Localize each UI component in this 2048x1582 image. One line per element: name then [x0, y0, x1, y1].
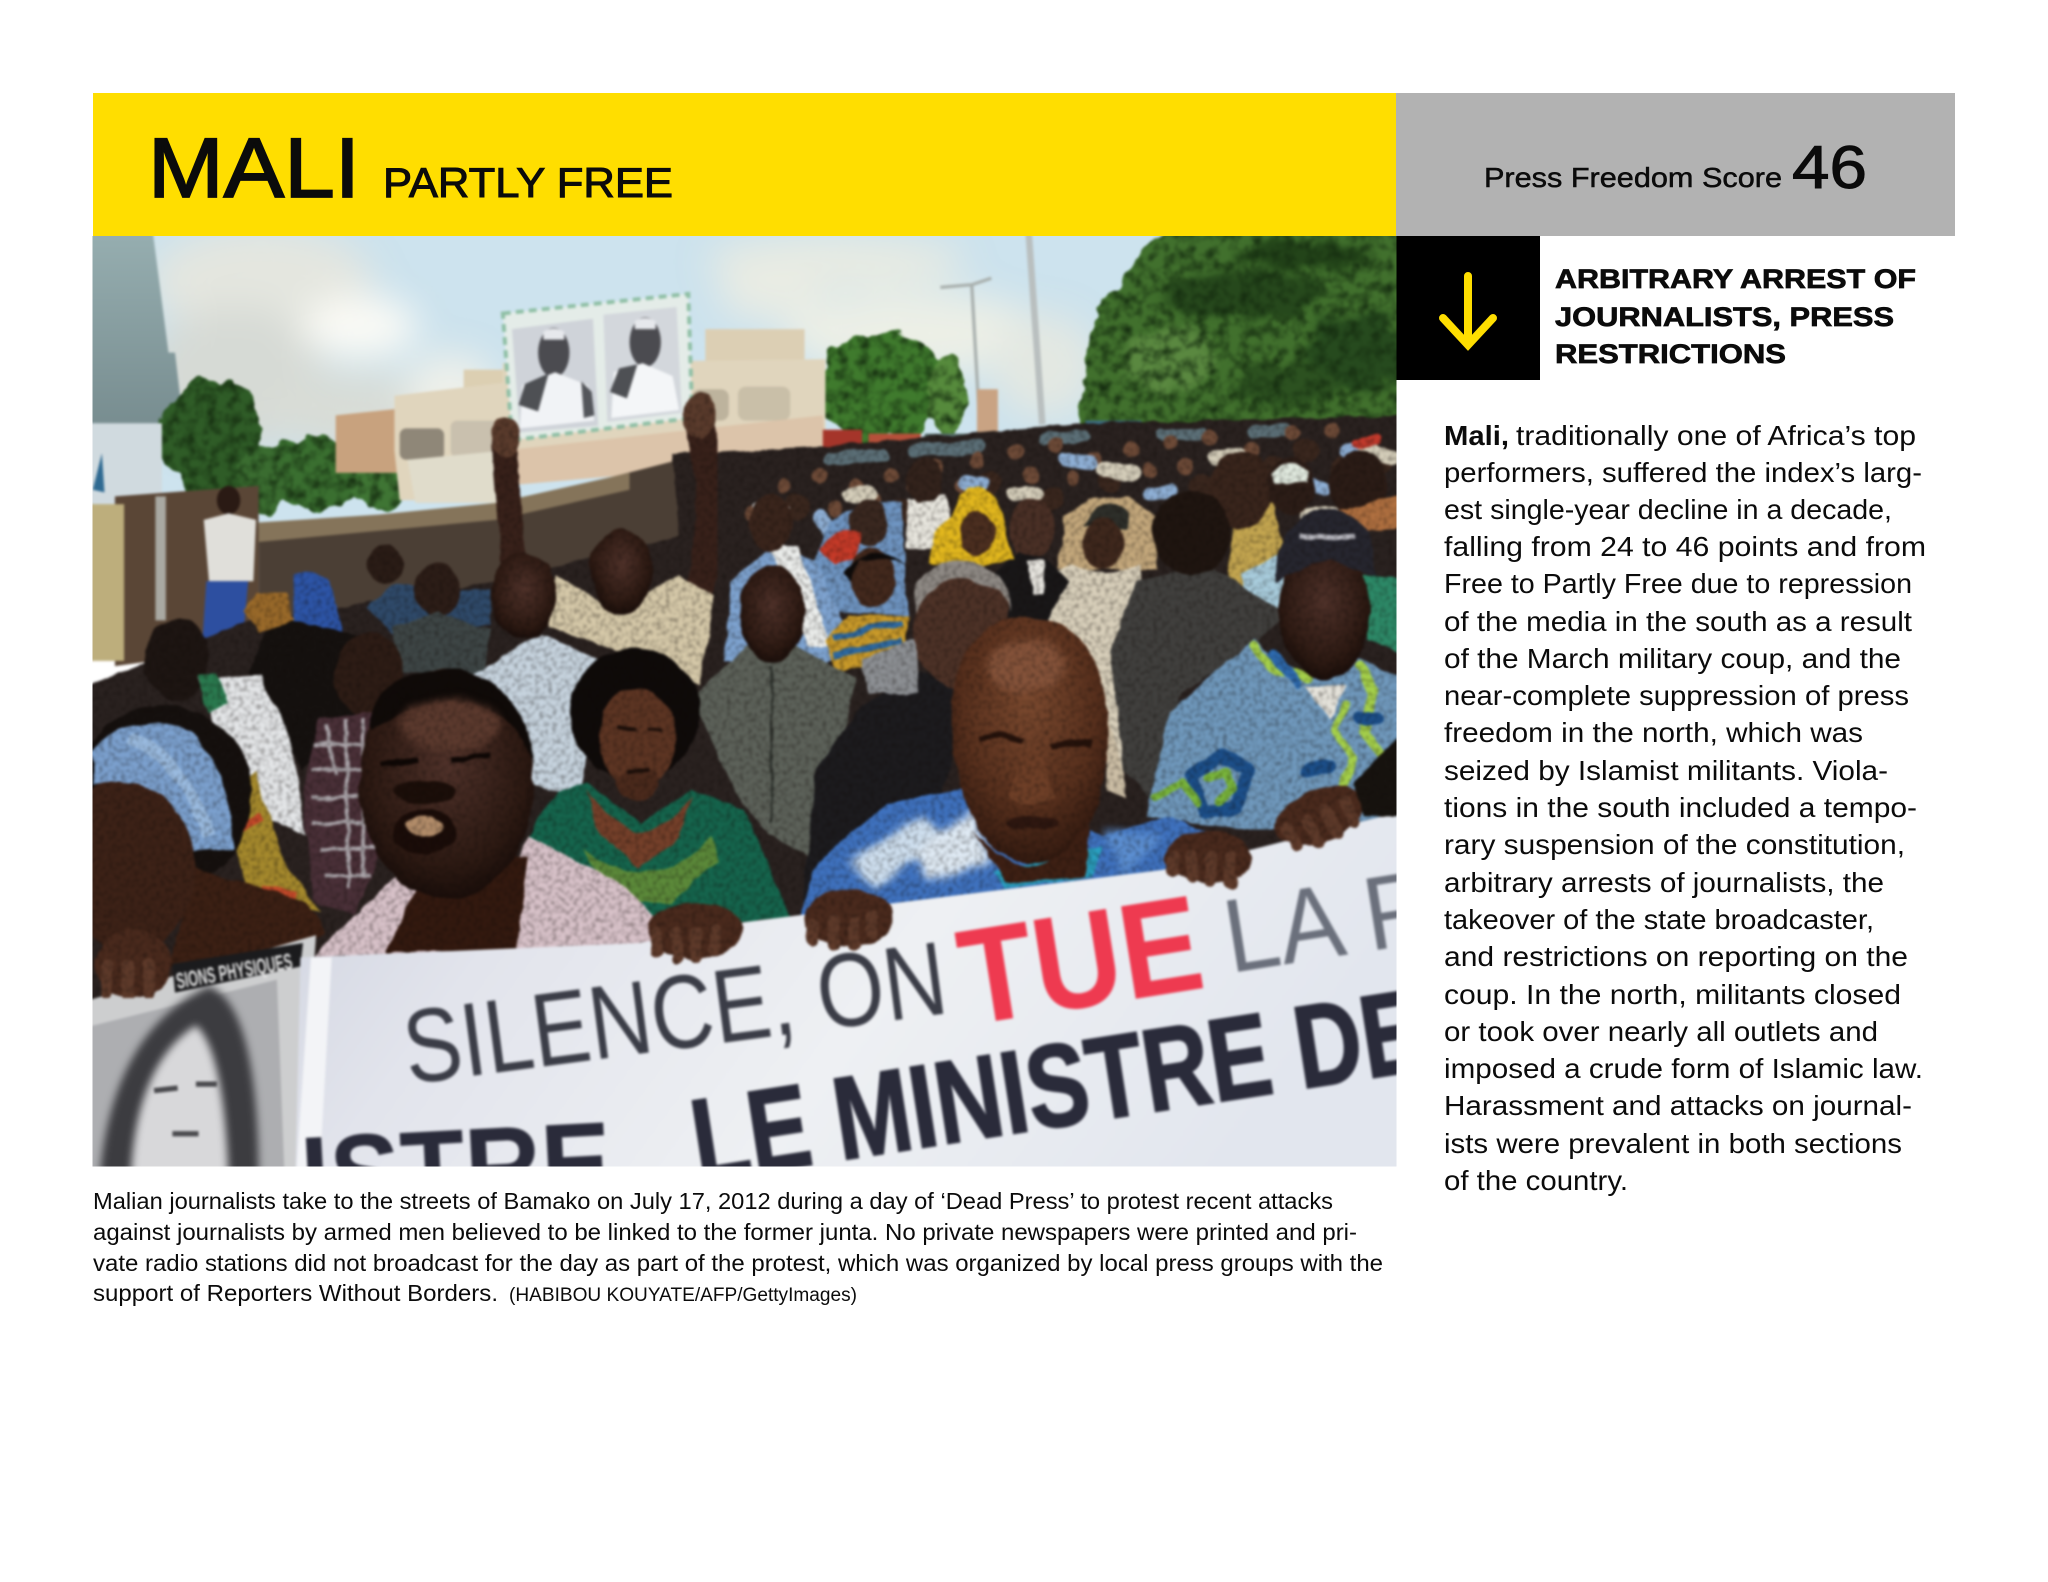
woman with blue head wrap [65, 705, 327, 967]
body text: country summary: rary suspension of the constitution, [1444, 829, 1905, 860]
body text: country summary: ists were prevalent in both sections [1444, 1128, 1902, 1159]
left wall, sign and pillar [78, 423, 259, 666]
man in patterned shirt and cap [1147, 509, 1404, 829]
woman with curly hair in green dress [529, 648, 790, 934]
photo of a person held in front [78, 935, 316, 1182]
man in blue and white shirt front centre [799, 616, 1254, 940]
title: Mali: MALI [148, 121, 360, 215]
trees [162, 216, 1430, 512]
photo credit: (HABIBOU KOUYATE/AFP/GettyImages) [509, 1285, 857, 1306]
body text: country summary [1444, 420, 1926, 1196]
street traffic far away [823, 389, 1142, 456]
white banner with slogan [295, 806, 1438, 1242]
man in dark grey jacket [1104, 491, 1287, 799]
photo caption: against journalists by armed men believed to be linked to the former junta. No private newspapers were printed and pri- [93, 1219, 1357, 1245]
man with raised arms in cream shirt [491, 392, 717, 686]
dense crowd in the distance [92, 414, 1396, 1002]
body text: country summary: performers, suffered the index’s larg- [1444, 457, 1922, 488]
grey tower at left edge [92, 236, 182, 425]
heading: decline reason: RESTRICTIONS [1555, 339, 1786, 369]
heading: decline reason: JOURNALISTS, PRESS [1555, 302, 1894, 332]
body text: country summary: imposed a crude form of Islamic law. [1444, 1053, 1923, 1084]
status: partly free: PARTLY FREE [383, 159, 673, 206]
slogan red word: TUE [949, 866, 1212, 1054]
man in dark jacket [803, 560, 1011, 908]
icon: yellow down arrow on black square [1396, 236, 1540, 380]
white banner with slogan: ISTRE [298, 1098, 615, 1242]
body text: country summary: falling from 24 to 46 points and from [1444, 531, 1926, 562]
body text: country summary: tions in the south included a tempo- [1444, 792, 1917, 823]
body text: country summary: arbitrary arrests of journalists, the [1444, 867, 1884, 898]
body text: country summary: Free to Partly Free due to repression [1444, 568, 1912, 599]
background marchers [294, 451, 1404, 771]
photo caption [93, 1188, 1383, 1306]
man in white shirt [473, 552, 598, 797]
slogan line one: SILENCE, ON [397, 920, 953, 1107]
hands gripping the banner [94, 731, 1404, 998]
score panel: grey press freedom score [1396, 93, 1955, 236]
poster held aloft [503, 294, 692, 440]
body text: country summary: traditionally one of Africa’s top [1516, 420, 1916, 451]
body text: country summary: seized by Islamist militants. Viola- [1444, 755, 1888, 786]
white banner with slogan: LA P [1216, 848, 1438, 996]
body text: country summary: Harassment and attacks on journal- [1444, 1090, 1912, 1121]
body text: country summary: Mali, [1444, 420, 1509, 451]
body text: country summary: takeover of the state broadcaster, [1444, 904, 1874, 935]
street lamp and pole [940, 222, 1042, 424]
body text: country summary: or took over nearly all outlets and [1444, 1016, 1878, 1047]
man in grey shirt [692, 566, 856, 862]
body text: country summary: coup. In the north, militants closed [1444, 979, 1901, 1010]
body text: country summary: of the media in the south as a result [1444, 606, 1912, 637]
score label: Press Freedom Score [1484, 162, 1782, 193]
sky and clouds [152, 236, 1164, 524]
body text: country summary: near-complete suppression of press [1444, 680, 1909, 711]
photo caption: Malian journalists take to the streets of Bamako on July 17, 2012 during a day of ‘Dead Press’ to protest recent attacks [93, 1188, 1333, 1214]
marchers mid left [144, 593, 405, 914]
heading: decline reason: ARBITRARY ARREST OF [1555, 264, 1916, 294]
body text: country summary: of the country. [1444, 1165, 1628, 1196]
photo caption: vate radio stations did not broadcast for the day as part of the protest, which was organized by local press groups with the [93, 1250, 1383, 1276]
body text: country summary: est single-year decline in a decade, [1444, 494, 1892, 525]
photo caption: support of Reporters Without Borders. [93, 1280, 498, 1306]
body text: country summary: of the March military coup, and the [1444, 643, 1901, 674]
slogan line two: LE MINISTRE DE [683, 964, 1432, 1207]
photo of a person held in front: SIONS PHYSIQUES [174, 949, 294, 994]
body text: country summary: and restrictions on reporting on the [1444, 941, 1908, 972]
brick wall [256, 460, 680, 617]
heading: decline reason [1555, 264, 1916, 369]
photo: journalists protest march in Bamako [92, 236, 1396, 1166]
man singing in pink jacket [313, 669, 666, 960]
header band: yellow country title [93, 93, 1396, 236]
cream building [336, 329, 825, 503]
body text: country summary: freedom in the north, which was [1444, 717, 1863, 748]
score value: 46 [1792, 134, 1867, 201]
